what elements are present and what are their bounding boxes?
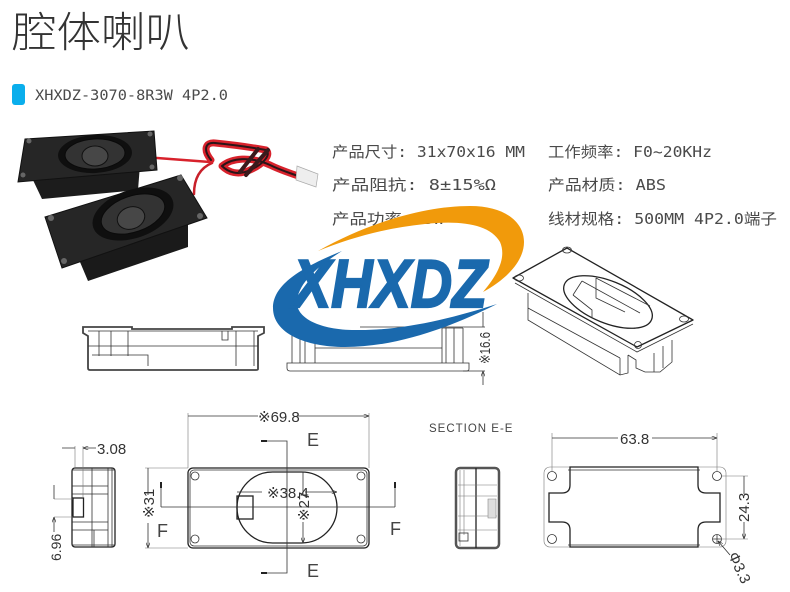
spec: material: 产品材质: ABS [548,176,666,194]
section drawing: long cross-section [83,327,264,370]
bottom plan view with dimensions [544,431,754,586]
section label: E bottom: E [307,561,319,581]
section E-E view [456,468,499,548]
isometric drawing [513,247,693,375]
spec: frequency: 工作频率: F0~20KHz [548,143,712,161]
dimension: 63.8: 63.8 [620,431,649,448]
speaker: rear [18,131,157,199]
logo: XHXDZ [273,206,524,347]
section label: F right: F [390,519,401,539]
spec: wire: 线材规格: 500MM 4P2.0端子 [548,210,777,228]
spec: impedance: 产品阻抗: 8±15%Ω [332,176,496,194]
dimension arrows [482,312,484,385]
model number: XHXDZ-3070-8R3W 4P2.0 [35,88,228,104]
section label: E top: E [307,430,319,450]
dimension: 16.6: ※16.6 [477,332,494,364]
cable [157,143,298,194]
side elevation with 16.6 dimension [287,312,494,385]
dimension: 69.8: ※69.8 [258,409,300,426]
icon: blue marker [12,84,25,105]
blue swoosh [273,251,497,347]
wordmark: XHXDZ [290,246,489,322]
dimension: diameter 3.3: Φ3.3 [724,550,754,586]
dimension: 27: ※27 [296,492,313,521]
section E-E heading: SECTION E-E [429,423,513,435]
title: 腔体喇叭 [12,9,190,56]
dimension: 6.96: 6.96 [48,534,64,561]
connector [296,166,318,187]
spec: size: 产品尺寸: 31x70x16 MM [332,143,525,161]
top plan view with dimensions [141,409,401,581]
speaker: front [45,175,207,281]
orange swoosh [318,206,524,292]
spec: power: 产品功率: 3W [332,210,445,228]
specifications [332,143,777,228]
product photo: two speakers with cable [18,131,318,281]
dimension: 3.08: 3.08 [97,441,126,458]
dimension: 31: ※31 [141,489,158,518]
dimension: 38.4: ※38.4 [267,485,309,502]
section label: F left: F [157,521,168,541]
end view with 3.08 and 6.96 dimensions [48,441,126,561]
model label [12,84,228,105]
dimension: 24.3: 24.3 [736,493,753,522]
